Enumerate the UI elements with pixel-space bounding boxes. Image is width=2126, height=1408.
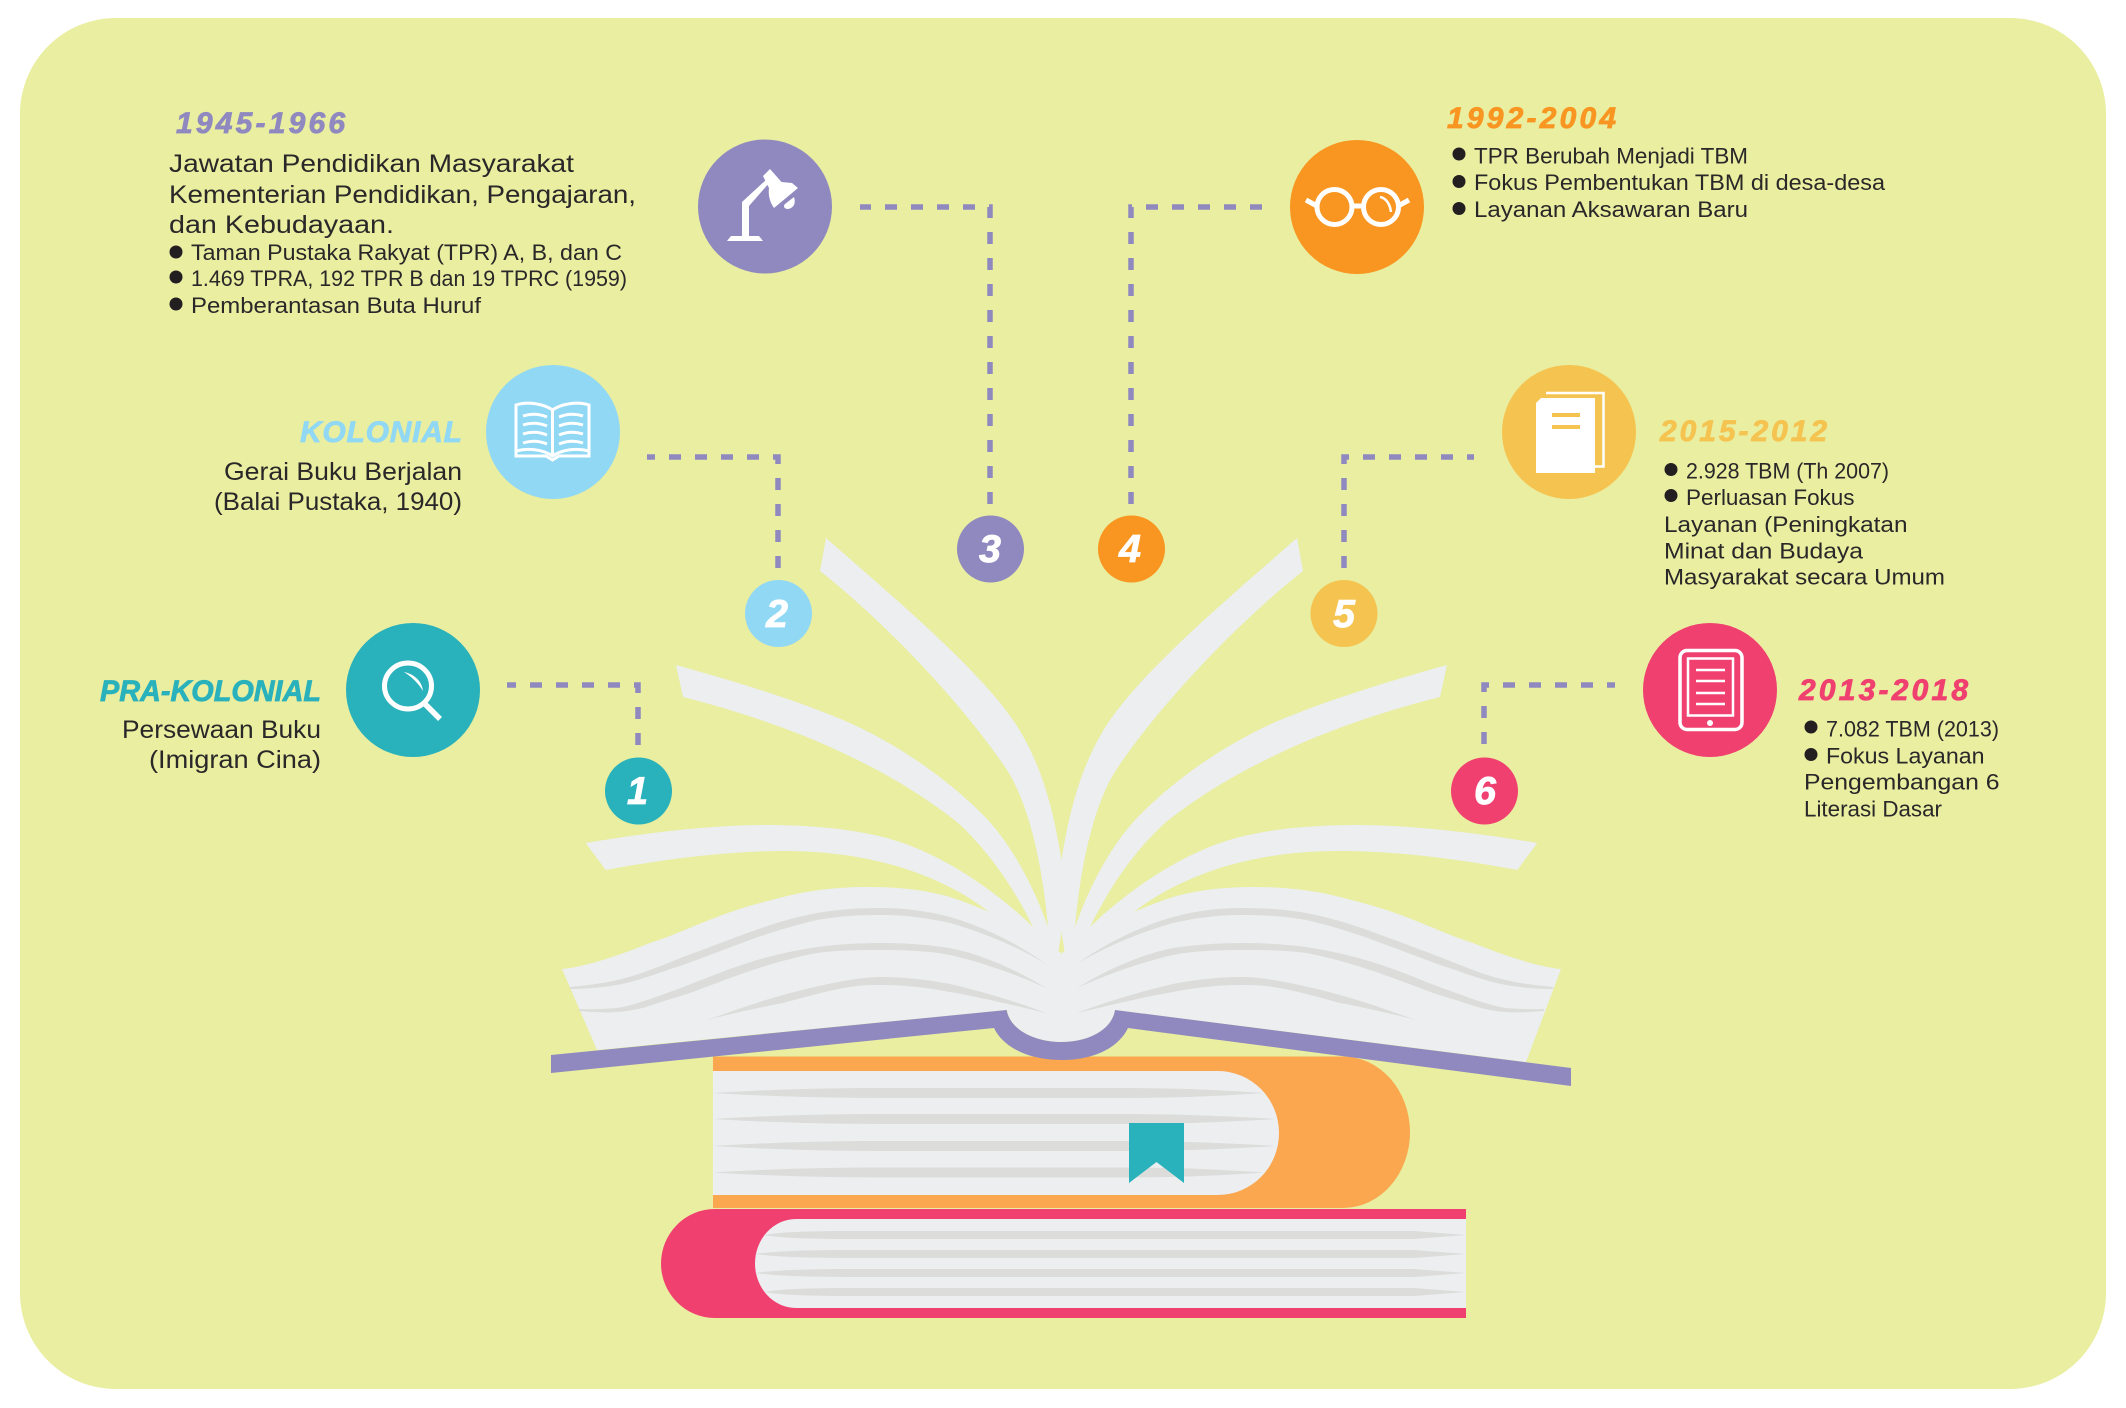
text block: 2013-2018: 7.082 TBM (2013) <box>1826 716 1999 742</box>
heading: 2013-2018: 2013-2018 <box>1798 674 1968 707</box>
connector 3 <box>860 207 990 504</box>
icon: open book <box>486 365 620 499</box>
text block: pra-kolonial: Persewaan Buku <box>122 716 321 744</box>
icon: bookmark <box>1129 1123 1184 1183</box>
icon: tablet <box>1643 623 1777 757</box>
illustration: stack of books with open book <box>551 538 1571 1318</box>
connector 6 <box>1484 685 1615 744</box>
connector 2 <box>647 457 778 568</box>
open book: page shading left <box>570 908 1046 1020</box>
connector 5 <box>1344 457 1474 568</box>
text block: 1992-2004: TPR Berubah Menjadi TBM <box>1474 144 1748 168</box>
text block: 2015-2012: 2.928 TBM (Th 2007) <box>1686 458 1889 484</box>
number badge 1 <box>605 758 672 824</box>
heading: 1992-2004: 1992-2004 <box>1447 102 1616 135</box>
open book: page shading right <box>1077 908 1553 1020</box>
text block: kolonial: (Balai Pustaka, 1940) <box>214 488 462 516</box>
text block: 1945-1966: Kementerian Pendidikan, Pengajaran, <box>169 181 636 209</box>
icon: document book <box>1502 365 1636 499</box>
text block: 2013-2018: Fokus Layanan <box>1826 744 1984 768</box>
text block: 2013-2018 <box>1798 674 2000 822</box>
text block: pra-kolonial: (Imigran Cina) <box>149 746 321 774</box>
text block: 1945-1966: dan Kebudayaan. <box>169 211 394 239</box>
number badge 6: 6 <box>1474 770 1496 813</box>
text block: 1945-1966: Jawatan Pendidikan Masyarakat <box>169 150 574 178</box>
text block: 2013-2018: Literasi Dasar <box>1804 796 1942 822</box>
text block: 2015-2012 <box>1659 415 1945 590</box>
connector 1 <box>507 685 638 745</box>
text block: 2015-2012: Minat dan Budaya <box>1664 538 1864 564</box>
flying pages right <box>1062 538 1537 953</box>
text block: pra-kolonial <box>100 675 321 774</box>
heading: PRA-KOLONIAL: PRA-KOLONIAL <box>100 675 321 708</box>
number badge 2: 2 <box>765 593 788 636</box>
text block: kolonial: Gerai Buku Berjalan <box>224 458 462 486</box>
number badge 4 <box>1098 516 1165 582</box>
icon: desk lamp <box>698 140 832 274</box>
text block: 1945-1966: Taman Pustaka Rakyat (TPR) A, B, dan C <box>191 240 622 265</box>
text block: 1992-2004 <box>1447 102 1886 222</box>
flying pages left <box>586 538 1062 953</box>
connector 4 <box>1131 207 1262 504</box>
number badge 3 <box>957 516 1024 582</box>
text block: 2015-2012: Perluasan Fokus <box>1686 485 1854 510</box>
number badge 6 <box>1451 758 1518 824</box>
heading: 1945-1966: 1945-1966 <box>176 107 345 140</box>
text block: 2013-2018: Pengembangan 6 <box>1804 770 2000 794</box>
text block: 1945-1966 <box>169 107 636 318</box>
bottom book: pink <box>661 1209 1466 1318</box>
number badge 2 <box>745 580 812 647</box>
middle book: orange <box>713 1056 1410 1208</box>
text block: 1945-1966: Pemberantasan Buta Huruf <box>191 293 482 318</box>
open book: purple cover <box>551 1010 1571 1086</box>
text block: 1945-1966: 1.469 TPRA, 192 TPR B dan 19 TPRC (1959) <box>191 266 627 291</box>
heading: KOLONIAL: KOLONIAL <box>300 416 462 449</box>
number badge 5 <box>1310 580 1378 647</box>
number badge 3: 3 <box>979 528 1001 571</box>
open book: pages <box>562 887 1561 1062</box>
icon: magnifier <box>346 623 480 757</box>
text block: 2015-2012: Masyarakat secara Umum <box>1664 564 1945 590</box>
icon: glasses <box>1290 140 1424 274</box>
open book: centre fill <box>989 912 1134 1000</box>
text block: kolonial <box>214 416 462 516</box>
heading: 2015-2012: 2015-2012 <box>1659 415 1827 448</box>
text block: 1992-2004: Layanan Aksawaran Baru <box>1474 197 1748 222</box>
open book: centre slit <box>1058 932 1064 954</box>
text block: 1992-2004: Fokus Pembentukan TBM di desa-desa <box>1474 170 1886 195</box>
number badge 5: 5 <box>1333 593 1356 636</box>
text block: 2015-2012: Layanan (Peningkatan <box>1664 512 1908 537</box>
number badge 4: 4 <box>1118 528 1141 571</box>
number badge 1: 1 <box>627 770 648 813</box>
